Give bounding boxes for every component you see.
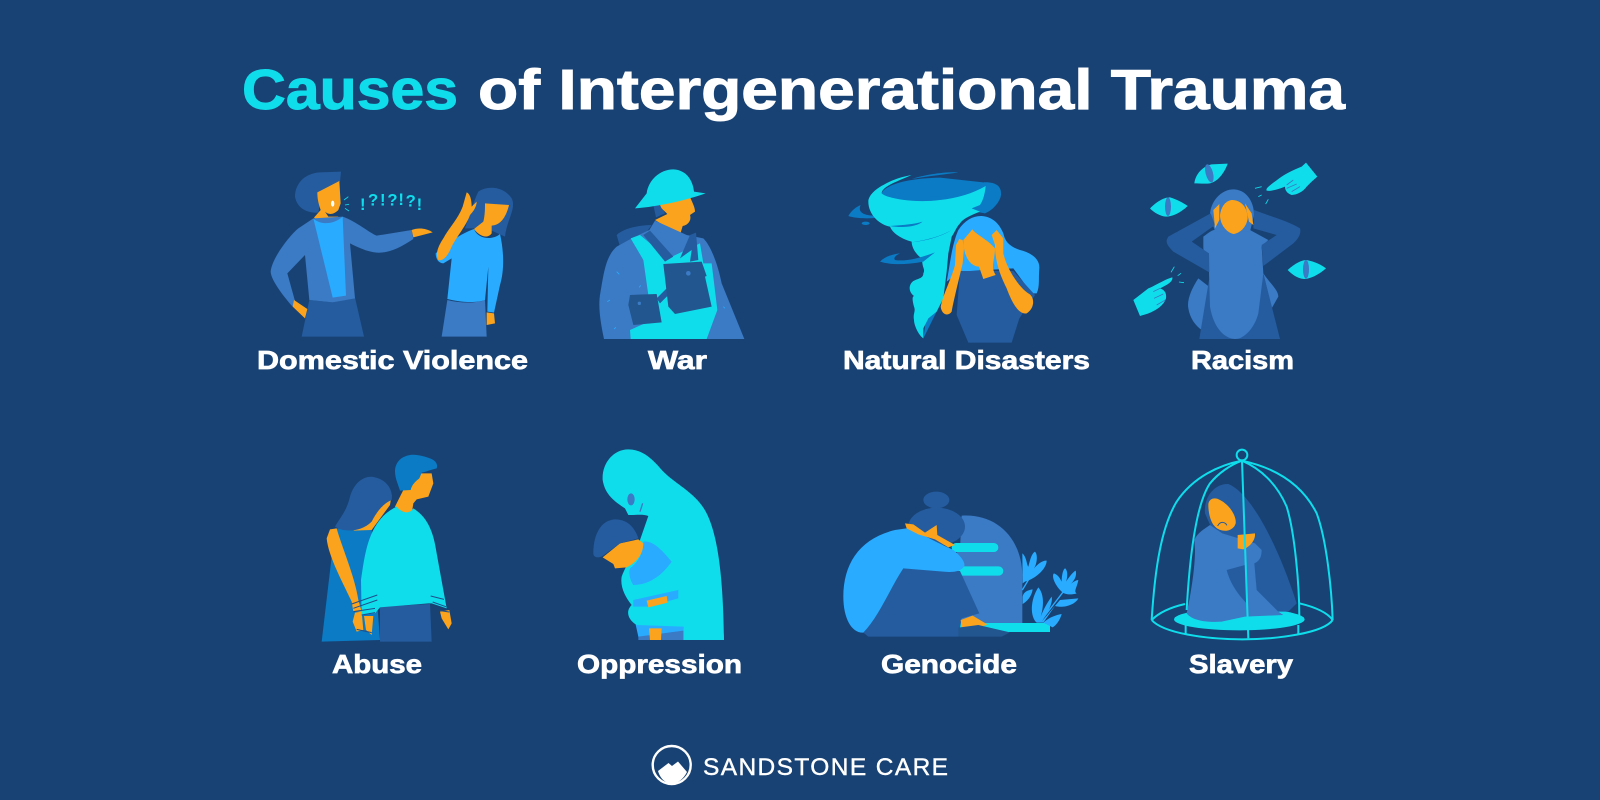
exclamation text: !?!?!?!	[360, 190, 422, 214]
panel: natural disasters	[843, 172, 1090, 375]
title: Causes	[242, 58, 458, 122]
cage wires	[1152, 450, 1333, 639]
wordmark: SANDSTONE CARE	[703, 754, 948, 781]
panel: oppression	[577, 449, 742, 679]
label: domestic violence: Domestic Violence	[257, 345, 528, 375]
panel: slavery	[1152, 450, 1333, 679]
panel: abuse	[322, 455, 452, 679]
label: genocide: Genocide	[881, 649, 1017, 679]
label: slavery: Slavery	[1189, 649, 1294, 679]
label: racism: Racism	[1191, 345, 1294, 375]
panel: genocide	[843, 492, 1078, 679]
panel: war	[599, 169, 744, 375]
title: of Intergenerational Trauma	[478, 58, 1346, 122]
label: natural disasters: Natural Disasters	[843, 345, 1090, 375]
label: war: War	[648, 345, 707, 375]
illustration: tornado and woman	[848, 172, 1039, 343]
illustration: bound couple	[322, 455, 452, 642]
icon: mountain in circle	[653, 746, 691, 784]
illustration: figure in birdcage	[1152, 450, 1333, 639]
illustration: soldier	[599, 169, 744, 339]
illustration: large figure hugging child	[593, 449, 724, 640]
illustration: figure with eyes and pointing hands	[1133, 163, 1326, 339]
illustration: person at gravestone	[843, 492, 1078, 637]
panel: domestic violence	[257, 172, 528, 375]
label: oppression: Oppression	[577, 649, 742, 679]
logo: sandstone care	[653, 746, 948, 784]
label: abuse: Abuse	[332, 649, 422, 679]
panel: racism	[1133, 163, 1326, 375]
illustration: arguing couple	[271, 172, 513, 337]
title	[242, 58, 1346, 122]
